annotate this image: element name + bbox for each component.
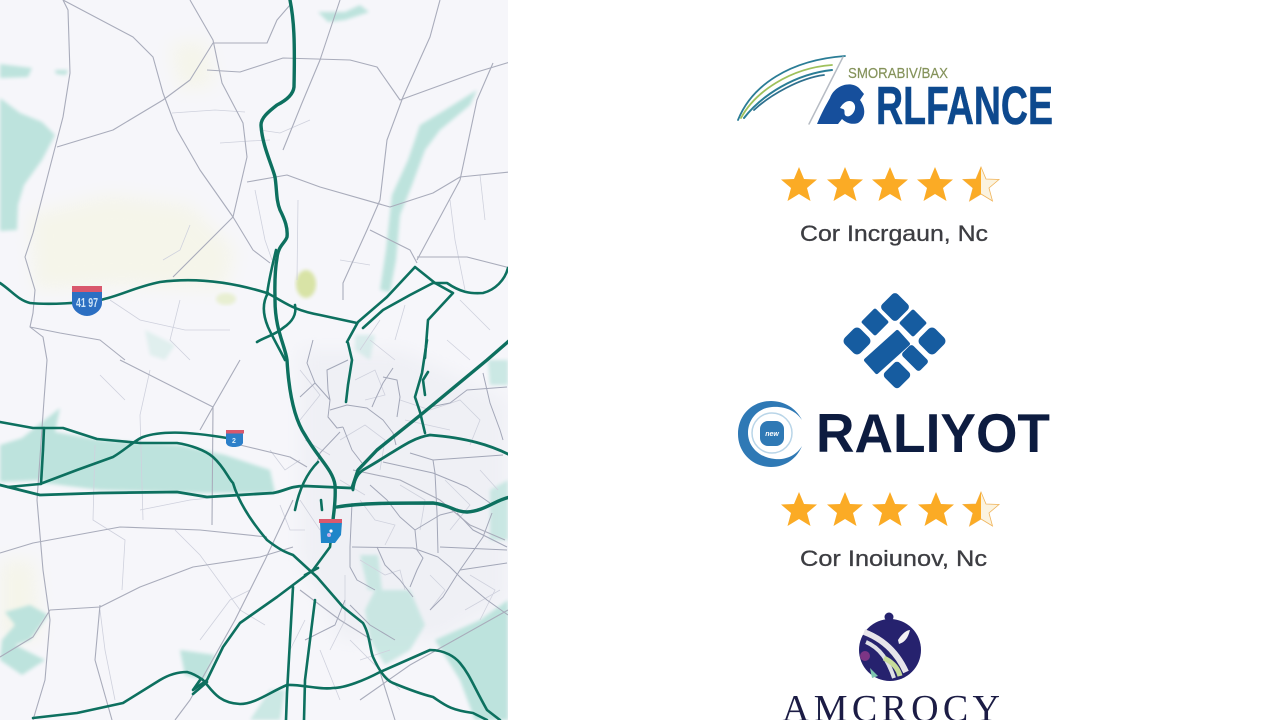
green highways — [0, 0, 510, 720]
highway shield: center: 2 — [232, 438, 236, 445]
highway shield: center — [226, 430, 244, 447]
city area tint — [300, 350, 508, 640]
rating stars: second — [781, 492, 999, 526]
major gray roads — [0, 0, 510, 720]
swoosh emblem — [738, 56, 845, 124]
map water and parks — [0, 5, 508, 720]
logo: Raliyot — [738, 401, 1050, 467]
highway shield: west: 41 97 — [76, 295, 98, 310]
city street network — [300, 340, 508, 640]
highway: west band upper — [0, 422, 487, 720]
company name: first: Cor Incrgaun, Nc — [800, 221, 988, 246]
wordmark: RALIYOT — [816, 402, 1050, 464]
highway: upper west-east — [0, 280, 357, 323]
panel: road map — [0, 0, 510, 720]
company name: second: Cor Inoiunov, Nc — [800, 546, 987, 571]
highway: north-east diagonal — [352, 340, 510, 488]
highway: north-south trunk — [261, 0, 335, 520]
logo: Amcrocy — [782, 612, 1000, 720]
highway: south-west diagonal — [192, 543, 332, 692]
highway: east spur — [337, 497, 510, 512]
logo: diamond tiles — [841, 291, 948, 390]
ring emblem — [738, 401, 802, 467]
highway: south loop — [33, 650, 500, 720]
subtitle: SMORABIV/BAX — [848, 65, 948, 82]
wordmark: RLFANCE — [876, 76, 1053, 136]
highway shield: city — [319, 519, 342, 543]
rating stars: first — [781, 167, 999, 201]
highway shield: west — [72, 286, 102, 316]
blue mark — [817, 84, 864, 124]
logo: Rlfance — [738, 56, 1053, 136]
round emblem — [859, 612, 921, 681]
fine street texture — [93, 110, 500, 700]
map land tint — [0, 40, 235, 640]
map green patch — [296, 270, 316, 298]
logo: Raliyot: new — [765, 431, 779, 438]
